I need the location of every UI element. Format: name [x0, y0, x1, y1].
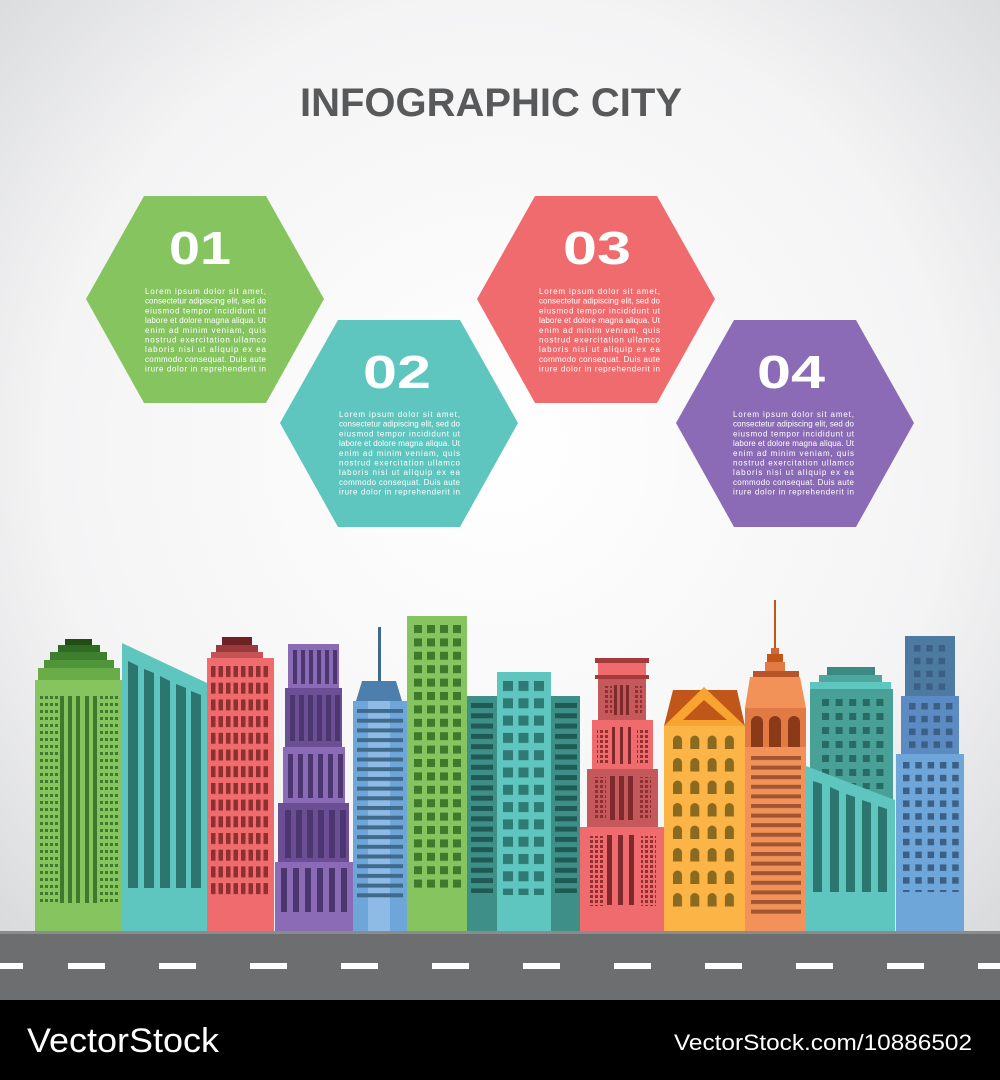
panel: hexagon 02: laboris nisi ut aliquip ex ea — [339, 468, 461, 477]
building: teal grid — [497, 672, 551, 932]
panel: hexagon 02: consectetur adipiscing elit, sed do — [339, 420, 461, 429]
panel: hexagon 02: enim ad minim veniam, quis — [339, 449, 460, 458]
road — [0, 931, 1000, 1000]
building: teal slanted right — [806, 766, 895, 932]
panel: hexagon 04: consectetur adipiscing elit, sed do — [733, 420, 855, 429]
panel: hexagon 04: enim ad minim veniam, quis — [733, 449, 854, 458]
panel: hexagon 01: consectetur adipiscing elit, sed do — [145, 297, 267, 306]
building: blue with antenna — [353, 627, 407, 932]
panel: hexagon 02: eiusmod tempor incididunt ut — [339, 429, 461, 438]
panel: hexagon 03: eiusmod tempor incididunt ut — [539, 306, 661, 315]
panel: hexagon 02: commodo consequat. Duis aute — [339, 478, 461, 487]
panel: hexagon 03: commodo consequat. Duis aute — [539, 355, 661, 364]
building: red tiered — [580, 658, 664, 932]
panel: hexagon 04: 04 — [757, 346, 826, 398]
building: green stepped — [35, 639, 122, 932]
panel: hexagon 04: laboris nisi ut aliquip ex ea — [733, 468, 855, 477]
building: dark teal rear — [810, 667, 893, 809]
footer watermark bar: VectorStock — [27, 1022, 220, 1060]
building: teal slanted — [122, 643, 207, 932]
building: dark teal right — [551, 696, 580, 932]
panel: hexagon 03: enim ad minim veniam, quis — [539, 326, 660, 335]
panel: hexagon 04 — [676, 320, 914, 527]
panel: hexagon 03: nostrud exercitation ullamco — [539, 336, 661, 344]
panel: hexagon 01: nostrud exercitation ullamco — [145, 336, 267, 344]
panel: hexagon 01: enim ad minim veniam, quis — [145, 326, 266, 335]
panel: hexagon 02 — [280, 320, 518, 527]
title: INFOGRAPHIC CITY — [300, 81, 682, 125]
panel: hexagon 02: Lorem ipsum dolor sit amet, — [339, 410, 460, 419]
panel: hexagon 01: eiusmod tempor incididunt ut — [145, 306, 267, 315]
panel: hexagon 02: labore et dolore magna aliqua. Ut — [339, 439, 461, 448]
panel: hexagon 02: irure dolor in reprehenderit in — [339, 488, 460, 497]
building: purple stacked — [275, 644, 353, 932]
building: tall green — [407, 616, 467, 932]
building: orange spire — [745, 600, 806, 932]
footer watermark bar — [0, 1000, 1000, 1080]
panel: hexagon 04: eiusmod tempor incididunt ut — [733, 429, 855, 438]
panel: hexagon 04: irure dolor in reprehenderit in — [733, 488, 854, 497]
panel: hexagon 03 — [477, 196, 715, 403]
panel: hexagon 03: laboris nisi ut aliquip ex ea — [539, 345, 661, 354]
panel: hexagon 01: laboris nisi ut aliquip ex ea — [145, 345, 267, 354]
building: blue tiered — [896, 636, 964, 932]
panel: hexagon 01: labore et dolore magna aliqua. Ut — [145, 316, 267, 325]
panel: hexagon 02: nostrud exercitation ullamco — [339, 458, 461, 468]
panel: hexagon 04: commodo consequat. Duis aute — [733, 478, 855, 487]
panel: hexagon 02: 02 — [363, 346, 431, 398]
panel: hexagon 04: Lorem ipsum dolor sit amet, — [733, 410, 854, 419]
panel: hexagon 01: irure dolor in reprehenderit in — [145, 365, 266, 374]
building: dark teal left — [467, 696, 497, 932]
panel: hexagon 04: nostrud exercitation ullamco — [733, 458, 855, 468]
panel: hexagon 01: 01 — [169, 222, 231, 274]
panel: hexagon 01: commodo consequat. Duis aute — [145, 355, 267, 364]
panel: hexagon 03: 03 — [563, 222, 631, 274]
panel: hexagon 03: irure dolor in reprehenderit in — [539, 365, 660, 374]
panel: hexagon 03: labore et dolore magna aliqua. Ut — [539, 316, 661, 325]
building: red tower — [207, 637, 274, 932]
panel: hexagon 01 — [86, 196, 324, 403]
city skyline — [35, 600, 964, 932]
panel: hexagon 01: Lorem ipsum dolor sit amet, — [145, 287, 266, 296]
footer watermark bar: VectorStock.com/10886502 — [674, 1030, 972, 1055]
panel: hexagon 03: consectetur adipiscing elit, sed do — [539, 297, 661, 306]
panel: hexagon 03: Lorem ipsum dolor sit amet, — [539, 287, 660, 296]
panel: hexagon 04: labore et dolore magna aliqua. Ut — [733, 439, 855, 448]
building: yellow arched — [664, 687, 745, 932]
